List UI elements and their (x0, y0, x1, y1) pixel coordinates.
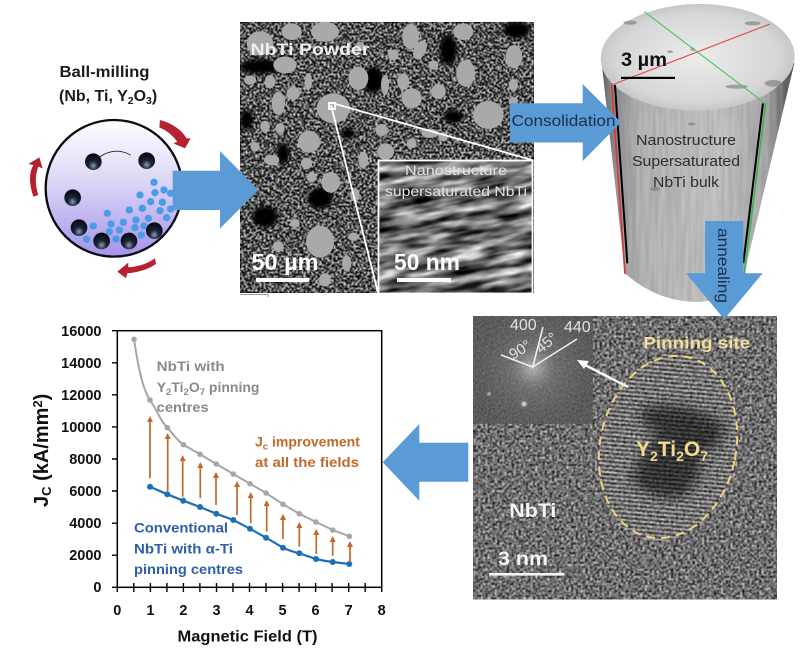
y axis title: C (39, 486, 54, 496)
x axis labels: 8 (378, 603, 386, 619)
label: inset caption: supersaturated NbTi (385, 183, 527, 199)
label: NbTi: NbTi (509, 501, 556, 522)
annotation: conventional NbTi: Conventional (134, 520, 228, 536)
label: bulk description: NbTi bulk (653, 175, 720, 191)
y axis labels: 8000 (69, 452, 102, 468)
label: Y2Ti2O7: O (684, 438, 700, 461)
FFT index 440: 440 (564, 319, 591, 336)
y axis labels: 0 (93, 580, 102, 596)
annotation: NbTi with Y2Ti2O7: pinning (205, 379, 259, 395)
label: bulk description (632, 133, 740, 191)
heading: ball-milling: (Nb, Ti, Y (59, 88, 128, 105)
micrograph: TEM pinning site (471, 306, 777, 600)
micrograph: NbTi powder SEM (240, 22, 534, 293)
label: Y2Ti2O7: Ti (658, 438, 676, 461)
x axis labels: 5 (279, 603, 287, 619)
curved path of ball (100, 151, 131, 157)
label: inset caption: Nanostructure (405, 162, 507, 178)
y axis labels: 2000 (69, 548, 102, 564)
arrow: consolidation (510, 84, 621, 161)
y axis labels: 14000 (61, 356, 102, 372)
annotation: Jc improvement: improvement (268, 434, 360, 450)
FFT axes (501, 327, 577, 367)
scale bar: 50 nm: 50 nm (394, 249, 460, 275)
x axis labels: 0 (113, 603, 121, 619)
FFT angle 90: 90° (506, 337, 534, 363)
annotation: NbTi with Y2Ti2O7 (157, 358, 259, 415)
blue series: conventional (147, 484, 352, 567)
scale bar: 3 nm (489, 549, 564, 576)
annotation: NbTi with Y2Ti2O7: Ti (171, 379, 184, 395)
label: bulk description: Nanostructure (636, 133, 736, 149)
annotation: NbTi with Y2Ti2O7: NbTi with (157, 358, 225, 374)
blue powder particles (83, 179, 174, 243)
dark voids and large particles (240, 22, 530, 287)
arrow: TEM to chart (383, 424, 468, 501)
y axis title: (kA/mm (31, 408, 53, 486)
annotation: Jc improvement: c (263, 442, 268, 453)
arrow: annealing: annealing (714, 228, 731, 303)
heading: ball-milling (59, 64, 157, 107)
arrow: annealing (686, 221, 763, 319)
heading: ball-milling: O (134, 88, 146, 105)
rotation arrows (28, 120, 191, 278)
annotation: Jc improvement: J (255, 434, 263, 450)
annotation: NbTi with Y2Ti2O7: Y (157, 379, 166, 395)
y axis title: J (31, 496, 53, 507)
arrow: pinning site to FFT (577, 360, 628, 387)
annotation: NbTi with Y2Ti2O7: 7 (200, 387, 205, 398)
grey series: Y2Ti2O7 pinning (131, 336, 352, 539)
label: Y2Ti2O7: 7 (700, 448, 708, 464)
annotation: Jc improvement: at all the fields (255, 454, 359, 470)
dashed outline: pinning site (582, 343, 754, 551)
annotation: NbTi with Y2Ti2O7: 2 (184, 387, 189, 398)
arrow: ball-milling to powder (173, 151, 258, 228)
y axis labels: 16000 (61, 324, 102, 340)
heading: ball-milling: 2 (128, 95, 134, 107)
label: Y2Ti2O7: 2 (650, 448, 658, 464)
surface marks (623, 21, 782, 191)
arrow: consolidation: Consolidation (512, 113, 616, 130)
scale bar: 50 µm: 50 µm (252, 249, 318, 275)
label: bulk description: Supersaturated (632, 154, 740, 170)
FFT inset (473, 316, 593, 424)
y axis labels: 10000 (61, 420, 102, 436)
label: Pinning site: Pinning site (643, 334, 750, 352)
annotation: Jc improvement (255, 434, 360, 470)
plot frame (117, 331, 382, 587)
x axis labels: 2 (179, 603, 187, 619)
label: inset caption (385, 162, 527, 199)
x axis labels: 6 (312, 603, 320, 619)
inset: nanostructure (378, 160, 534, 293)
precipitate with lattice fringes (582, 339, 754, 555)
x axis labels: 4 (245, 603, 254, 619)
scale bar: 3 nm: 3 nm (498, 549, 548, 570)
label: Y2Ti2O7: 2 (676, 448, 684, 464)
x axis labels: 1 (146, 603, 154, 619)
scale bar: 3 µm: 3 µm (621, 50, 667, 71)
cylinder top face (600, 2, 796, 112)
label: Y2Ti2O7: Y (636, 438, 650, 461)
chart: Jc versus magnetic field (30, 324, 386, 646)
dark core (632, 405, 725, 498)
scale bar: 3 µm (621, 50, 675, 79)
illustration: ball mill vial (28, 120, 191, 278)
micrograph: consolidated cylinder (600, 2, 796, 303)
y axis labels: 12000 (61, 388, 102, 404)
annotation: NbTi with Y2Ti2O7: 2 (166, 387, 171, 398)
label: NbTi Powder: NbTi Powder (250, 40, 370, 59)
y axis labels: 4000 (69, 516, 102, 532)
heading: ball-milling: Ball-milling (60, 64, 150, 81)
FFT index 400: 400 (510, 317, 537, 334)
annotation: NbTi with Y2Ti2O7: O (189, 379, 200, 395)
heading: ball-milling: 3 (146, 95, 152, 107)
y axis title: ) (31, 394, 53, 400)
milling balls (64, 152, 163, 249)
FFT angle 45: 45° (533, 329, 561, 357)
zoom lines (329, 103, 532, 293)
y axis labels: 6000 (69, 484, 102, 500)
x axis title: Magnetic Field (T) (178, 628, 318, 646)
annotation: NbTi with Y2Ti2O7: centres (157, 399, 209, 415)
improvement arrows (147, 416, 353, 562)
annotation: conventional NbTi (134, 520, 243, 577)
x axis labels (113, 603, 386, 619)
x axis labels: 7 (345, 603, 353, 619)
y axis labels (61, 324, 102, 596)
annotation: conventional NbTi: pinning centres (134, 561, 243, 577)
y axis title: 2 (30, 400, 45, 408)
cylinder body (601, 57, 794, 302)
heading: ball-milling: ) (152, 88, 157, 105)
annotation: conventional NbTi: NbTi with α-Ti (134, 540, 233, 556)
x axis labels: 3 (212, 603, 221, 619)
section lines (612, 12, 770, 274)
